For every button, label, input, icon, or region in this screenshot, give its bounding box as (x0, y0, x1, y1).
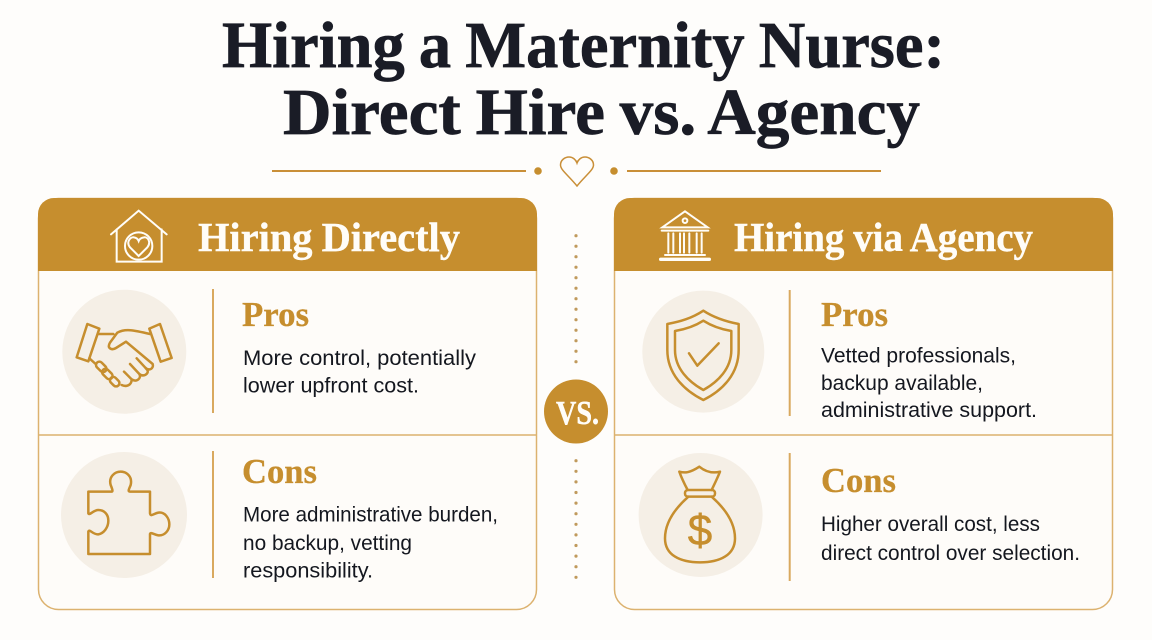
cons text: responsibility. (243, 560, 373, 582)
pros text: More control, potentially (243, 347, 477, 370)
panel heading: Hiring via Agency (734, 214, 1033, 260)
panel heading: Hiring Directly (198, 214, 460, 260)
icon: money bag: $ (688, 506, 712, 555)
row divider (614, 434, 1113, 436)
panel background (38, 198, 536, 610)
icon: handshake (62, 290, 186, 414)
panel: hiring via agency (614, 198, 1113, 610)
icon: shield with check (642, 291, 764, 413)
pros text (243, 347, 477, 398)
panel: hiring directly (38, 198, 537, 610)
icon: bank building (661, 211, 709, 259)
header bar (614, 198, 1113, 271)
title: Hiring a Maternity Nurse: (222, 9, 945, 82)
cons text (821, 513, 1080, 565)
pros text: administrative support. (821, 399, 1037, 422)
cons heading: Cons (242, 452, 317, 491)
dotted connector top (574, 236, 578, 362)
row divider (38, 434, 537, 436)
panel background (614, 198, 1112, 610)
cons text: no backup, vetting (243, 532, 412, 555)
dotted connector bottom (574, 461, 578, 578)
title (222, 9, 945, 149)
pros text (821, 344, 1037, 422)
pros heading: Pros (821, 295, 888, 334)
icon: puzzle piece (61, 452, 187, 578)
vs badge (544, 380, 608, 444)
cons text: More administrative burden, (243, 504, 498, 526)
title: Direct Hire vs. Agency (283, 76, 920, 149)
pros text: Vetted professionals, (821, 344, 1016, 368)
cons text: Higher overall cost, less (821, 513, 1040, 536)
icon: money bag (639, 453, 763, 577)
cons text (243, 504, 498, 582)
cons text: direct control over selection. (821, 542, 1080, 565)
vs badge: VS. (556, 395, 599, 432)
pros heading: Pros (242, 295, 309, 334)
heart divider ornament (272, 157, 881, 186)
header bar (38, 198, 537, 271)
pros text: lower upfront cost. (243, 374, 419, 398)
icon: house with heart (111, 211, 167, 262)
cons heading: Cons (821, 461, 896, 500)
pros text: backup available, (821, 372, 983, 395)
